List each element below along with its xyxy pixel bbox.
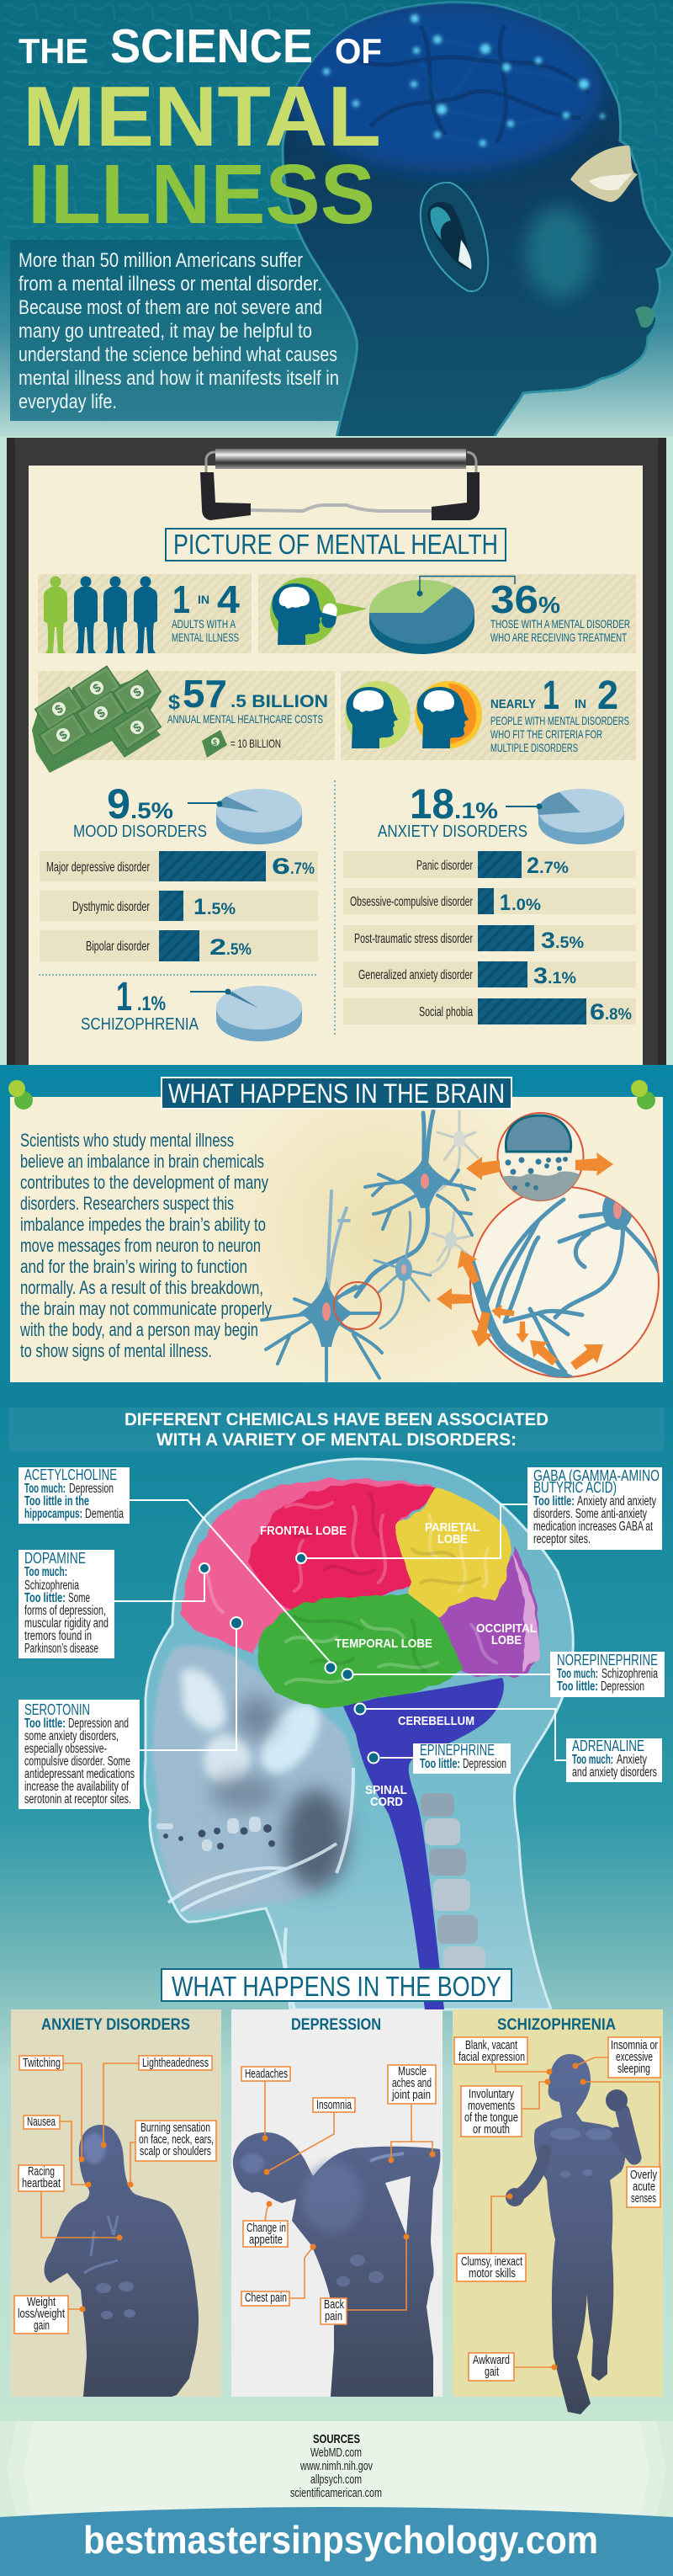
symptom labels: depression: appetite <box>249 2233 283 2247</box>
stat panel: healthcare costs: ANNUAL MENTAL HEALTHCARE COSTS <box>167 712 323 726</box>
icon: stacks of money: $ <box>130 720 144 735</box>
icon: four people, one highlighted <box>44 576 157 653</box>
footer sources panel: WebMD.com <box>310 2446 362 2460</box>
bar chart: anxiety disorders: 3 <box>541 928 555 953</box>
callout: epinephrine: EPINEPHRINE <box>420 1742 495 1759</box>
body text: brain explanation <box>19 1130 272 1361</box>
title: ILLNESS <box>28 147 375 242</box>
footer sources panel: scientificamerican.com <box>290 2486 382 2500</box>
symptom labels: anxiety disorders <box>14 2056 216 2334</box>
symptom labels: anxiety disorders: scalp or shoulders <box>140 2144 211 2158</box>
title: THE <box>19 31 88 71</box>
symptom labels: schizophrenia: movements <box>468 2099 515 2113</box>
symptom labels: schizophrenia: of the tongue <box>464 2110 518 2125</box>
stat panel: nearly 1 in 2: 2 <box>597 673 618 718</box>
bar chart: anxiety disorders: .1% <box>548 970 576 987</box>
panel: schizophrenia body <box>453 2009 663 2414</box>
callout: serotonin: some anxiety disorders, <box>24 1729 119 1743</box>
callout: dopamine <box>19 1550 114 1658</box>
connector lines from chemicals to brain <box>114 1500 566 1763</box>
callout: dopamine: tremors found in <box>24 1629 92 1643</box>
intro text panel <box>10 240 363 421</box>
callout: dopamine: muscular rigidity and <box>24 1616 109 1631</box>
callout: serotonin: antidepressant medications <box>24 1767 135 1781</box>
brain region labels: TEMPORAL LOBE <box>335 1637 432 1651</box>
symptom labels: anxiety disorders: Twitching <box>23 2056 61 2070</box>
bar chart: anxiety disorders: .5% <box>555 934 584 952</box>
bar chart: anxiety disorders: 6 <box>590 999 605 1025</box>
symptom labels: depression: pain <box>325 2309 342 2323</box>
brain highlights <box>202 1494 496 1684</box>
stat panel: healthcare costs: .5 BILLION <box>231 692 328 711</box>
callout: dopamine: Schizophrenia <box>24 1578 79 1593</box>
illustration: hunched figure <box>233 2132 440 2397</box>
callout: epinephrine: Too little: <box>420 1757 460 1771</box>
intro text panel: More than 50 million Americans suffer <box>19 249 303 272</box>
brain region labels: OCCIPITAL <box>476 1621 537 1636</box>
body text: brain explanation: believe an imbalance in brain chemicals <box>20 1151 264 1172</box>
bar chart: mood disorders: Major depressive disorder <box>46 860 150 875</box>
schizophrenia heading and pie: 1 <box>116 975 132 1019</box>
callout: dopamine: Some <box>68 1591 90 1605</box>
lobe: temporal <box>257 1594 464 1707</box>
bar chart: mood disorders: .5% <box>207 901 236 918</box>
callout: serotonin: Too little: <box>24 1716 66 1731</box>
icon: stacks of money: $ <box>52 701 66 716</box>
brain region labels: CORD <box>370 1795 403 1809</box>
body text: brain explanation: Scientists who study mental illness <box>20 1130 234 1151</box>
panel: anxiety disorders body <box>11 2009 221 2397</box>
illustration: pale background neurons <box>431 1111 478 1273</box>
body text: brain explanation: with the body, and a person may begin <box>19 1319 258 1340</box>
callout: adrenaline: Anxiety <box>617 1753 647 1767</box>
stat panel: 36 percent receiving treatment: % <box>538 592 560 618</box>
illustration: glowing head in profile <box>283 3 673 438</box>
bar chart: anxiety disorders: 2 <box>527 853 539 878</box>
bar chart: anxiety disorders: .8% <box>605 1006 632 1024</box>
lobe: frontal <box>249 1484 436 1610</box>
icon: stacks of money: $ <box>130 684 144 700</box>
callout: dopamine: Too much: <box>24 1565 67 1579</box>
callout: adrenaline: ADRENALINE <box>572 1738 644 1754</box>
callout: acetylcholine <box>19 1466 130 1524</box>
callout: acetylcholine: Too much: <box>24 1482 66 1496</box>
title: SCIENCE <box>110 19 313 73</box>
large magnified neuron circle <box>467 1187 659 1381</box>
icon: head with one disorder <box>345 681 411 748</box>
bar chart: anxiety disorders: 1 <box>500 890 511 915</box>
illustration: neuron network <box>262 1111 474 1381</box>
brain region labels: FRONTAL LOBE <box>260 1524 347 1538</box>
body text: brain explanation: contributes to the development of many <box>20 1172 268 1193</box>
footer website banner <box>0 2507 673 2576</box>
icon: stacks of money: $ <box>90 680 103 695</box>
brain region labels <box>260 1520 537 1809</box>
illustration: neuron cell bodies <box>299 1153 450 1347</box>
bar chart: mood disorders: Bipolar disorder <box>86 939 150 954</box>
body text: brain explanation: normally. As a result of this breakdown, <box>20 1277 263 1298</box>
body text: brain explanation: imbalance impedes the brain’s ability to <box>20 1214 266 1235</box>
symptom labels: anxiety disorders: gain <box>34 2318 50 2333</box>
callout: GABA: Too little: <box>533 1494 575 1509</box>
bar chart: anxiety disorders: Post-traumatic stress disorder <box>354 932 473 946</box>
icon: stacks of money: $ <box>94 705 108 721</box>
bar chart: anxiety disorders: Obsessive-compulsive disorder <box>350 895 473 909</box>
bar chart: mood disorders: .7% <box>290 860 315 878</box>
schizophrenia heading and pie: .1% <box>137 993 166 1015</box>
heading: what happens in the brain: WHAT HAPPENS IN THE BRAIN <box>168 1078 505 1109</box>
symptom labels: schizophrenia: excessive <box>616 2050 653 2064</box>
illustration: standing figure with raised fist <box>506 2054 634 2414</box>
stat panel: nearly 1 in 2: 1 <box>543 673 559 718</box>
callout: adrenaline <box>566 1738 662 1782</box>
panel: depression body: DEPRESSION <box>291 2016 381 2034</box>
icon: eye <box>570 146 638 202</box>
icon: single bill legend: $ <box>213 738 217 747</box>
symptom labels: depression: Headaches <box>245 2067 288 2081</box>
title: OF <box>335 31 382 71</box>
symptom labels: schizophrenia: motor skills <box>469 2266 516 2281</box>
stat panel: 1 in 4: IN <box>198 593 209 606</box>
symptom labels: depression: Back <box>324 2297 344 2312</box>
callout: acetylcholine: ACETYLCHOLINE <box>24 1466 117 1483</box>
anxiety disorders heading and pie: .1% <box>454 798 498 823</box>
pie chart: 1.1 percent <box>190 986 302 1041</box>
brain region labels: LOBE <box>437 1532 468 1546</box>
panel: depression body <box>231 2009 442 2397</box>
pie chart: 36 percent <box>369 576 515 654</box>
illustration: translucent head and skull <box>145 1459 573 2009</box>
icon: stacks of money <box>32 666 161 773</box>
callout: acetylcholine: Too little in the <box>24 1494 89 1509</box>
lobe: parietal <box>397 1488 511 1616</box>
stat panel: healthcare costs: 57 <box>183 672 227 716</box>
bar chart: mood disorders: .5% <box>226 941 252 959</box>
bar chart: anxiety disorders: Social phobia <box>419 1005 473 1019</box>
intro text panel: understand the science behind what causes <box>19 343 337 366</box>
anxiety disorders heading and pie: ANXIETY DISORDERS <box>378 822 527 841</box>
callout: GABA: receptor sites. <box>533 1532 591 1546</box>
schizophrenia heading and pie: SCHIZOPHRENIA <box>81 1015 199 1034</box>
bar chart: anxiety disorders: 3 <box>533 963 548 988</box>
stat panel: nearly 1 in 2: NEARLY <box>490 697 536 711</box>
symptom labels: anxiety disorders: Racing <box>28 2164 55 2179</box>
callout: acetylcholine: hippocampus: <box>24 1507 82 1521</box>
callout: dopamine: DOPAMINE <box>24 1550 86 1567</box>
body text: brain explanation: and for the brain’s wiring to function <box>20 1256 247 1277</box>
lower section background <box>0 1065 673 2509</box>
intro text panel: Because most of them are not severe and <box>19 296 322 319</box>
clipboard clip <box>200 449 480 520</box>
callout: serotonin: serotonin at receptor sites. <box>24 1792 131 1807</box>
panel: what happens in the brain <box>10 1097 663 1382</box>
anxiety disorders heading and pie: 18 <box>410 780 454 828</box>
title: MENTAL <box>23 70 381 164</box>
body text: brain explanation: disorders. Researchers suspect this <box>20 1193 234 1214</box>
mood disorders heading and pie <box>73 780 302 844</box>
stat panel: 1 in 4: ADULTS WITH A <box>172 617 236 631</box>
intro text panel: mental illness and how it manifests itself in <box>19 367 339 390</box>
icon: left push pins <box>8 1080 33 1110</box>
stat panel: 1 in 4: MENTAL ILLNESS <box>172 631 239 644</box>
callout: norepinephrine: Depression <box>601 1679 644 1694</box>
mood disorders heading and pie: 9 <box>107 780 130 828</box>
symptom labels: depression <box>241 2064 436 2324</box>
bar chart: mood disorders: Dysthymic disorder <box>72 900 150 914</box>
bar chart: anxiety disorders <box>343 851 636 1025</box>
bar chart: anxiety disorders: Panic disorder <box>416 859 473 873</box>
stat panel: healthcare costs: = 10 BILLION <box>231 737 281 750</box>
bar chart: anxiety disorders: Generalized anxiety disorder <box>358 968 473 982</box>
icon: head with multiple disorders <box>415 681 482 748</box>
footer sources panel: SOURCES <box>313 2432 360 2446</box>
bar chart: anxiety disorders: .7% <box>539 860 569 877</box>
icon: single bill legend <box>202 730 227 758</box>
callout: epinephrine: Depression <box>463 1757 506 1771</box>
footer sources panel: allpsych.com <box>310 2472 362 2487</box>
illustration: figure holding chest <box>44 2125 199 2397</box>
stat panel: 1 in 4: 1 <box>172 577 190 621</box>
bar chart: mood disorders: 6 <box>272 854 290 879</box>
schizophrenia heading and pie <box>81 975 302 1041</box>
icon: lips <box>635 306 654 327</box>
callout: serotonin: increase the availability of <box>24 1780 129 1794</box>
callout: dopamine: Too little: <box>24 1591 66 1605</box>
bar chart: anxiety disorders: .0% <box>511 897 541 914</box>
callout: serotonin: SEROTONIN <box>24 1701 90 1718</box>
symptom labels: depression: Chest pain <box>245 2291 287 2305</box>
body text: brain explanation: to show signs of mental illness. <box>20 1340 212 1361</box>
illustration: coloured brain lobes <box>180 1479 539 2009</box>
callout: serotonin <box>19 1700 140 1809</box>
intro text panel: from a mental illness or mental disorder. <box>19 273 322 295</box>
callout: norepinephrine: Too much: <box>557 1667 598 1681</box>
symptom labels: depression: aches and <box>392 2076 432 2090</box>
symptom labels: schizophrenia: Clumsy, inexact <box>461 2254 523 2269</box>
brain region labels: SPINAL <box>365 1783 407 1797</box>
header background <box>0 0 673 442</box>
bar chart: mood disorders <box>40 851 318 961</box>
anxiety disorders heading and pie <box>378 780 624 844</box>
callout: acetylcholine: Dementia <box>85 1507 124 1521</box>
body text: brain explanation: the brain may not communicate properly <box>20 1298 272 1319</box>
symptom labels: schizophrenia: Awkward <box>473 2353 510 2367</box>
brain region labels: LOBE <box>491 1633 522 1647</box>
intro text panel: everyday life. <box>19 391 117 413</box>
bar chart: mood disorders: 1 <box>193 894 206 919</box>
symptom labels: anxiety disorders: heartbeat <box>22 2176 61 2190</box>
symptom labels: anxiety disorders: on face, neck, ears, <box>139 2132 214 2147</box>
symptom labels: schizophrenia: senses <box>631 2191 656 2206</box>
mood disorders heading and pie: .5% <box>130 798 173 823</box>
lobe: occipital <box>437 1545 539 1678</box>
callout: norepinephrine: Too little: <box>557 1679 598 1694</box>
pie chart: 9.5 percent <box>188 789 302 844</box>
callout: serotonin: Depression and <box>68 1716 129 1731</box>
mood disorders heading and pie: MOOD DISORDERS <box>73 822 207 841</box>
callout: dopamine: Parkinson’s disease <box>24 1642 98 1656</box>
symptom labels: schizophrenia: sleeping <box>617 2062 650 2076</box>
pie chart: 18.1 percent <box>506 789 624 844</box>
body text: brain explanation: move messages from neuron to neuron <box>20 1235 261 1256</box>
symptom labels: schizophrenia: gait <box>485 2365 500 2379</box>
clipboard background <box>0 436 673 1078</box>
symptom labels: schizophrenia: acute <box>633 2179 655 2194</box>
callout: serotonin: compulsive disorder. Some <box>24 1754 130 1769</box>
callout: GABA <box>527 1467 662 1550</box>
heading: picture of mental health: PICTURE OF MENTAL HEALTH <box>173 529 498 560</box>
symptom labels: anxiety disorders: Lightheadedness <box>142 2056 209 2070</box>
stat panel: nearly 1 in 2 <box>341 671 636 760</box>
symptom labels: anxiety disorders: Burning sensation <box>140 2121 210 2135</box>
arrows: chemical signal flow <box>437 1152 613 1376</box>
symptom labels: schizophrenia: Overly <box>630 2168 657 2182</box>
panel: anxiety disorders body: ANXIETY DISORDERS <box>41 2016 190 2034</box>
magnified synapse circle <box>496 1113 589 1204</box>
icon: stacks of money: $ <box>56 727 70 742</box>
callout: epinephrine <box>413 1742 511 1774</box>
heading: different chemicals <box>125 1410 548 1450</box>
stat panel: healthcare costs <box>32 666 335 773</box>
symptom labels: schizophrenia: or mouth <box>473 2122 510 2137</box>
footer sources panel: www.nimh.nih.gov <box>299 2459 373 2473</box>
symptom labels: depression: Insomnia <box>316 2098 352 2112</box>
stat panel: nearly 1 in 2: WHO FIT THE CRITERIA FOR <box>490 727 602 741</box>
skull teeth <box>163 1824 275 1850</box>
heading: different chemicals: WITH A VARIETY OF MENTAL DISORDERS: <box>156 1430 517 1450</box>
panel: schizophrenia body: SCHIZOPHRENIA <box>497 2016 616 2034</box>
icon: right push pins <box>631 1080 655 1110</box>
title <box>19 19 382 242</box>
symptom labels: depression: joint pain <box>391 2088 431 2102</box>
stat panel: 1 in 4 <box>38 574 252 653</box>
callout: GABA: BUTYRIC ACID) <box>533 1479 617 1496</box>
stat panel: 36 percent receiving treatment: 36 <box>490 577 538 621</box>
symptom labels: schizophrenia: Involuntary <box>469 2087 514 2101</box>
callout: adrenaline: Too much: <box>572 1753 613 1767</box>
neck vertebrae <box>421 1793 489 1999</box>
stat panel: nearly 1 in 2: IN <box>575 697 586 711</box>
symptom labels: schizophrenia: Blank, vacant <box>465 2038 518 2052</box>
symptom labels: anxiety disorders: loss/weight <box>18 2307 66 2321</box>
symptom labels: depression: Muscle <box>398 2064 427 2078</box>
brain region labels: PARIETAL <box>425 1520 480 1535</box>
footer website banner: bestmastersinpsychology.com <box>83 2518 598 2562</box>
heading: what happens in the body: WHAT HAPPENS IN THE BODY <box>172 1971 501 2002</box>
brain region labels: CEREBELLUM <box>398 1714 474 1728</box>
symptom labels: anxiety disorders: Nausea <box>27 2115 56 2129</box>
bar chart: mood disorders: 2 <box>209 934 226 960</box>
stat panel: 1 in 4: 4 <box>217 577 240 621</box>
footer sources panel <box>0 2421 673 2521</box>
intro text panel: many go untreated, it may be helpful to <box>19 320 312 343</box>
callout: norepinephrine <box>550 1652 665 1697</box>
callout: acetylcholine: Depression <box>69 1482 114 1496</box>
callout: serotonin: especially obsessive- <box>24 1742 107 1756</box>
symptom labels: schizophrenia: facial expression <box>458 2050 525 2064</box>
lobe: prefrontal pale pink <box>180 1479 433 1654</box>
stat panel: nearly 1 in 2: MULTIPLE DISORDERS <box>490 741 578 754</box>
heading: different chemicals: DIFFERENT CHEMICALS HAVE BEEN ASSOCIATED <box>125 1410 548 1429</box>
lobe: cerebellum and spinal cord <box>343 1678 504 2009</box>
stat panel: 36 percent receiving treatment <box>258 574 636 654</box>
icon: head with pill <box>270 577 368 645</box>
stat panel: healthcare costs: $ <box>168 691 181 714</box>
symptom labels: anxiety disorders: Weight <box>27 2295 56 2309</box>
icon: ear <box>421 183 488 291</box>
small highlight circle <box>334 1282 381 1329</box>
symptom labels: schizophrenia <box>454 2037 660 2381</box>
symptom labels: depression: Change in <box>246 2221 286 2235</box>
callout: dopamine: forms of depression, <box>24 1604 106 1618</box>
